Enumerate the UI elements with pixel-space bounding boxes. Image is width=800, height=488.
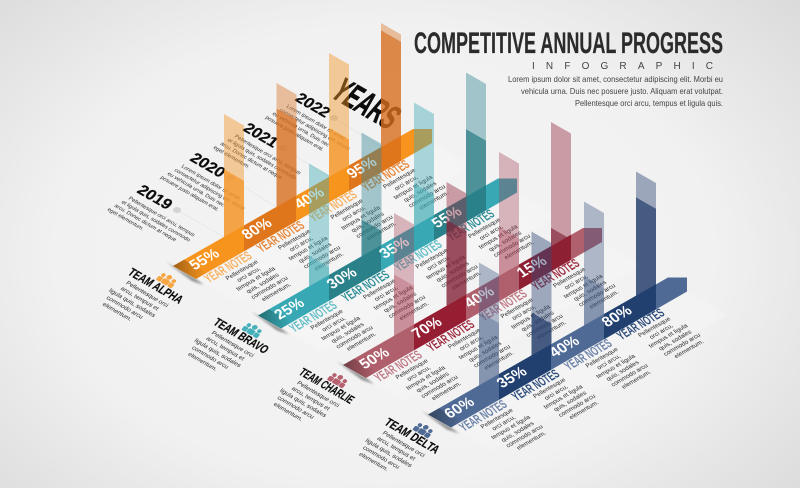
notes: team charlie: commodo arcu: [472, 343, 513, 369]
notes: team delta: Pellentesque: [479, 407, 515, 430]
subtitle: INFOGRAPHIC: [532, 61, 713, 72]
intro paragraph: [508, 74, 723, 108]
year 2022: eu vehicula urna. Duis nec: [271, 111, 331, 148]
notes: team delta: quis, sodales: [500, 420, 536, 444]
notes: team charlie: elementum.: [430, 380, 463, 402]
notes: team charlie: YEAR NOTES: [529, 256, 583, 293]
notes: team delta: tempus et ligula: [490, 414, 532, 441]
notes: team delta: commodo arcu: [610, 362, 650, 388]
notes: team delta: Pellentesque: [637, 315, 673, 339]
team alpha label: TEAM ALPHA: [125, 266, 186, 306]
year 2020: Lorem ipsum dolor sit amet,: [180, 164, 243, 203]
year 2022: [264, 85, 381, 162]
team charlie label: ligula quis, sodales: [278, 388, 328, 419]
notes: team alpha: tempus et ligula: [235, 265, 277, 293]
percent labels: team bravo: [271, 204, 466, 323]
bars: team delta: [479, 172, 656, 400]
year 2020: [159, 145, 276, 222]
percent labels: team bravo: 55%: [429, 204, 466, 232]
year 2019: eget elementum.: [106, 207, 145, 232]
percent labels: team delta: [441, 303, 636, 422]
notes: team bravo: orci arcu,: [426, 254, 452, 272]
notes: team alpha: elementum.: [365, 220, 398, 242]
percent labels: team delta: 35%: [494, 364, 531, 392]
notes: team charlie: tempus et ligula: [510, 303, 552, 331]
band: team charlie: [343, 228, 602, 378]
notes: team alpha: quis, sodales: [245, 272, 281, 295]
bars: team bravo: [309, 72, 486, 300]
notes: team charlie: Pellentesque: [499, 296, 535, 320]
notes: team charlie: commodo arcu: [577, 282, 618, 308]
notes: team bravo: elementum.: [345, 331, 378, 352]
notes: team bravo: quis, sodales: [487, 230, 523, 253]
team delta label: TEAM DELTA: [382, 416, 443, 456]
year 2019: arcu. Donec dictum at neque: [113, 203, 177, 243]
percent labels: team alpha: 95%: [344, 154, 381, 182]
percent labels: team charlie: 70%: [409, 314, 446, 342]
team delta label: [354, 414, 443, 486]
notes: team delta: commodo arcu: [505, 423, 545, 449]
year 2020: 2020: [186, 150, 229, 181]
notes: team alpha: tempus et ligula: [392, 174, 435, 201]
year 2022: Lorem ipsum dolor sit amet,: [285, 104, 348, 143]
year 2021: [212, 115, 329, 192]
percent labels: team delta: 40%: [546, 333, 583, 361]
year 2019: et ligula quis, sodales commodo: [120, 200, 191, 243]
notes: team bravo: elementum.: [398, 300, 431, 322]
notes: team delta: commodo arcu: [662, 332, 703, 358]
notes: team alpha: commodo arcu: [302, 244, 343, 270]
percent labels: team alpha: 55%: [186, 246, 223, 274]
notes: team alpha: orci arcu,: [236, 266, 262, 284]
team bravo label: arcu, tempus et: [204, 336, 246, 362]
notes: team delta: commodo arcu: [557, 393, 598, 419]
team charlie label: TEAM CHARLIE: [296, 366, 357, 406]
notes: team delta: YEAR NOTES: [614, 306, 668, 343]
notes: team alpha: commodo arcu: [407, 183, 448, 209]
notes: team alpha: elementum.: [313, 251, 346, 272]
notes: team bravo: YEAR NOTES: [339, 268, 393, 305]
percent labels: team bravo: 25%: [271, 295, 308, 323]
panel: team alpha track: [166, 23, 472, 318]
year 2022: consectetur adipiscing elit. Morbi: [278, 108, 351, 152]
year 2019: Pellentesque orci arcu, tempus: [127, 196, 196, 238]
notes: team bravo: quis, sodales: [435, 260, 471, 284]
notes: team charlie: commodo arcu: [525, 313, 565, 339]
bars: team alpha: [224, 23, 401, 251]
bars: team charlie: [394, 122, 571, 350]
notes: team charlie: elementum.: [588, 289, 621, 310]
notes: team bravo: Pellentesque: [309, 308, 345, 331]
team delta label: commodo arcu: [361, 445, 401, 471]
year 2022: posuere justo aliquam erat.: [264, 115, 325, 153]
team alpha label: arcu, tempus et: [119, 286, 160, 312]
notes: team charlie: Pellentesque: [394, 357, 430, 381]
notes: team bravo: quis, sodales: [330, 321, 366, 345]
notes: team bravo: quis, sodales: [382, 291, 418, 314]
year 2021: 2021: [239, 120, 282, 151]
percent labels: team charlie: 40%: [461, 284, 498, 312]
notes: team delta: Pellentesque: [532, 376, 568, 400]
notes: team bravo: tempus et ligula: [425, 254, 467, 281]
notes: team charlie: Pellentesque: [447, 327, 483, 350]
percent labels: team charlie: [356, 253, 551, 373]
notes: team alpha: commodo arcu: [355, 214, 395, 240]
notes: team bravo: orci arcu,: [321, 315, 347, 333]
notes: team alpha: tempus et ligula: [287, 235, 330, 262]
percent labels: team bravo: 35%: [376, 234, 413, 262]
year 2021: Pellentesque orci arcu, tempus: [233, 134, 302, 176]
notes: team alpha: Pellentesque: [329, 197, 365, 221]
notes: team delta: [456, 299, 708, 466]
notes: team delta: quis, sodales: [657, 329, 693, 352]
year 2020: eu vehicula urna. Duis nec: [166, 171, 226, 208]
band: team delta: [428, 278, 687, 428]
percent labels: team alpha: 80%: [239, 215, 276, 243]
team bravo label: commodo arcu: [190, 345, 230, 371]
intro paragraph: vehicula urna. Duis nec posuere justo. Aliquam erat volutpat.: [521, 86, 723, 96]
notes: team delta: orci arcu,: [491, 414, 517, 432]
notes: team alpha: tempus et ligula: [340, 204, 382, 232]
notes: team charlie: YEAR NOTES: [476, 287, 530, 324]
notes: team bravo: commodo arcu: [440, 263, 480, 289]
notes: team alpha: Pellentesque: [224, 258, 260, 282]
notes: team charlie: elementum.: [483, 350, 516, 371]
notes: team alpha: quis, sodales: [350, 211, 386, 234]
notes: team bravo: orci arcu,: [478, 224, 505, 242]
notes: team bravo: YEAR NOTES: [391, 237, 445, 274]
team bravo label: [183, 314, 272, 386]
intro paragraph: Lorem ipsum dolor sit amet, consectetur adipiscing elit. Morbi eu: [508, 74, 723, 84]
notes: team delta: tempus et ligula: [595, 353, 637, 380]
team charlie label: elementum.: [272, 401, 304, 423]
notes: team delta: elementum.: [673, 338, 706, 360]
notes: team charlie: commodo arcu: [420, 374, 460, 400]
year 2021: et ligula quis, sodales commodo: [226, 138, 297, 181]
notes: team bravo: elementum.: [503, 239, 536, 261]
notes: team bravo: tempus et ligula: [372, 284, 415, 312]
notes: team alpha: orci arcu,: [288, 235, 315, 253]
notes: team delta: YEAR NOTES: [456, 397, 510, 434]
notes: team charlie: orci arcu,: [406, 365, 432, 383]
notes: team delta: quis, sodales: [605, 359, 641, 383]
panel: team delta track: [421, 172, 727, 466]
notes: team delta: orci arcu,: [648, 323, 675, 341]
years axis heading: YEARS: [324, 72, 409, 136]
notes: team alpha: YEAR NOTES: [306, 188, 360, 225]
team alpha label: [97, 264, 186, 336]
notes: team delta: YEAR NOTES: [561, 336, 615, 373]
notes: team alpha: elementum.: [260, 281, 293, 303]
team delta label: ligula quis, sodales: [364, 438, 413, 469]
notes: team bravo: YEAR NOTES: [444, 207, 498, 244]
notes: team charlie: quis, sodales: [467, 340, 503, 364]
percent labels: team charlie: 50%: [356, 345, 393, 373]
notes: team bravo: elementum.: [450, 270, 483, 291]
team alpha label: Pellentesque orci: [124, 280, 170, 309]
notes: team delta: quis, sodales: [552, 390, 588, 413]
notes: team bravo: tempus et ligula: [320, 315, 362, 342]
percent labels: team charlie: 15%: [514, 253, 551, 281]
notes: team delta: tempus et ligula: [647, 322, 690, 350]
notes: team bravo: Pellentesque: [414, 247, 450, 270]
team charlie label: [268, 364, 357, 436]
percent labels: team delta: 80%: [599, 303, 636, 331]
notes: team alpha: commodo arcu: [250, 275, 290, 301]
notes: team alpha: quis, sodales: [402, 180, 438, 204]
notes: team alpha: quis, sodales: [297, 241, 333, 265]
team bravo label: Pellentesque orci: [210, 330, 255, 359]
notes: team delta: elementum.: [568, 399, 601, 421]
notes: team bravo: [286, 200, 538, 367]
team charlie label: Pellentesque orci: [295, 380, 341, 409]
notes: team charlie: elementum.: [535, 319, 568, 341]
notes: team delta: tempus et ligula: [542, 383, 585, 411]
percent labels: team alpha: 40%: [291, 185, 328, 213]
team delta label: elementum.: [357, 451, 390, 473]
notes: team bravo: YEAR NOTES: [286, 298, 340, 335]
notes: team bravo: commodo arcu: [492, 233, 533, 259]
notes: team bravo: Pellentesque: [467, 216, 503, 240]
team charlie label: arcu, tempus et: [290, 386, 331, 412]
panel: team bravo track: [251, 72, 557, 367]
year 2020: consectetur adipiscing elit. Morbi: [173, 168, 246, 212]
notes: team alpha: orci arcu,: [393, 174, 420, 192]
notes: team bravo: orci arcu,: [373, 285, 400, 303]
year 2021: eget elementum.: [212, 145, 251, 170]
team alpha label: ligula quis, sodales: [107, 288, 157, 319]
notes: team charlie: quis, sodales: [572, 279, 608, 303]
notes: team alpha: YEAR NOTES: [254, 218, 308, 255]
notes: team charlie: tempus et ligula: [562, 273, 605, 300]
notes: team delta: orci arcu,: [543, 384, 570, 402]
intro paragraph: Pellentesque orci arcu, tempus et ligula quis.: [575, 98, 723, 108]
notes: team charlie: YEAR NOTES: [424, 317, 478, 354]
notes: team alpha: Pellentesque: [382, 167, 418, 190]
notes: team bravo: tempus et ligula: [477, 223, 520, 251]
notes: team delta: Pellentesque: [584, 346, 620, 369]
notes: team alpha: orci arcu,: [341, 205, 367, 223]
team alpha label: commodo arcu: [105, 295, 145, 321]
notes: team delta: orci arcu,: [596, 353, 622, 371]
notes: team alpha: [201, 150, 453, 318]
team bravo label: ligula quis, sodales: [193, 338, 242, 369]
team bravo label: elementum.: [186, 351, 219, 373]
notes: team charlie: tempus et ligula: [405, 364, 447, 392]
notes: team delta: elementum.: [620, 369, 653, 390]
team alpha label: elementum.: [101, 301, 133, 323]
team bravo label: TEAM BRAVO: [211, 316, 272, 356]
percent labels: team alpha: [186, 154, 381, 274]
notes: team alpha: YEAR NOTES: [359, 157, 413, 194]
team charlie label: commodo arcu: [276, 395, 316, 421]
team delta label: Pellentesque orci: [381, 430, 426, 459]
band: team alpha: [173, 129, 432, 279]
notes: team bravo: commodo arcu: [387, 294, 428, 320]
notes: team charlie: orci arcu,: [458, 334, 485, 352]
notes: team charlie: orci arcu,: [563, 273, 590, 291]
notes: team bravo: Pellentesque: [362, 277, 398, 301]
year 2019: 2019: [133, 182, 176, 213]
year 2021: arcu. Donec dictum at neque: [219, 141, 283, 181]
notes: team alpha: Pellentesque: [277, 228, 313, 251]
notes: team charlie: [371, 249, 623, 417]
notes: team delta: elementum.: [515, 430, 548, 451]
notes: team charlie: tempus et ligula: [457, 334, 500, 361]
notes: team charlie: YEAR NOTES: [371, 348, 425, 385]
panel: team charlie track: [336, 122, 642, 417]
notes: team alpha: YEAR NOTES: [201, 249, 255, 286]
notes: team bravo: commodo arcu: [335, 324, 375, 350]
notes: team alpha: elementum.: [418, 190, 451, 211]
year 2022: 2022: [291, 90, 334, 121]
notes: team charlie: quis, sodales: [520, 310, 556, 333]
notes: team charlie: Pellentesque: [552, 266, 588, 289]
notes: team charlie: orci arcu,: [511, 304, 537, 322]
year 2019: [106, 177, 224, 254]
band: team bravo: [258, 178, 517, 328]
year 2020: posuere justo aliquam erat.: [159, 175, 220, 213]
notes: team charlie: quis, sodales: [415, 371, 451, 394]
percent labels: team delta: 60%: [441, 394, 478, 422]
percent labels: team bravo: 30%: [324, 265, 361, 293]
team delta label: arcu, tempus et: [375, 436, 417, 462]
notes: team delta: YEAR NOTES: [509, 367, 563, 404]
